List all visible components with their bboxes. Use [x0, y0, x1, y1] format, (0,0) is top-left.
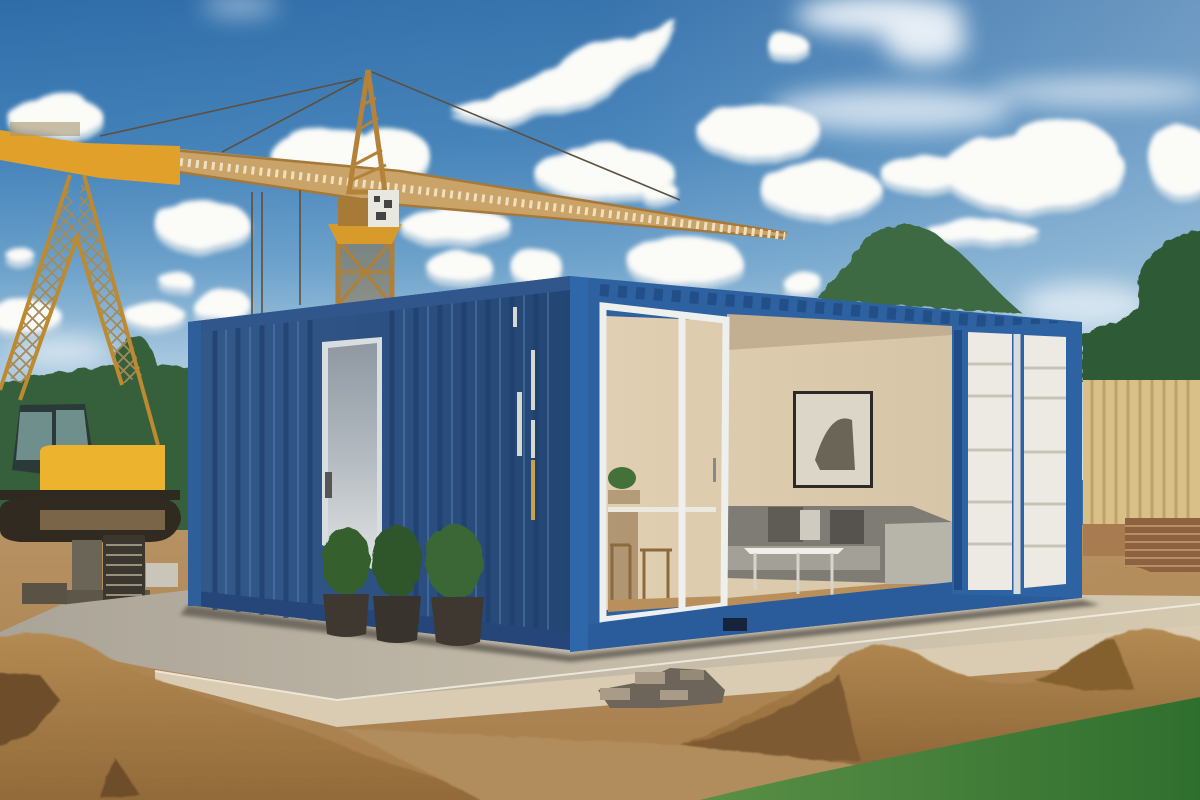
excavator: [0, 404, 181, 542]
concrete slab: [0, 590, 1200, 727]
container shadow: [180, 600, 1100, 662]
right pile: [680, 628, 1200, 765]
grass: [700, 697, 1200, 800]
bottom rail: [588, 582, 1080, 650]
gantry boom: [0, 130, 180, 185]
trees: left hedge: [0, 336, 192, 545]
plant 2: [372, 525, 422, 643]
coffee table: [744, 548, 844, 596]
open container doors: [952, 322, 1082, 598]
planters: [322, 524, 484, 646]
excavator tracks: [0, 498, 181, 542]
plant 1: [322, 527, 370, 637]
building materials left: [22, 535, 178, 630]
plant 3: [425, 524, 484, 646]
gantry legs: [0, 175, 158, 445]
crane mast: [338, 70, 392, 305]
side door: [322, 337, 382, 574]
crane cab: [328, 190, 402, 244]
lumber stack: [1082, 518, 1200, 596]
tower crane: [100, 70, 788, 315]
interior room: [606, 314, 952, 612]
container front frame: [570, 276, 1082, 652]
container side face: [188, 276, 570, 650]
sand foreground: [340, 728, 860, 800]
dirt piles: [0, 628, 1200, 800]
trees: right background: [820, 224, 1200, 382]
wall art: [793, 391, 873, 488]
container markings: [513, 307, 535, 520]
left gantry crane: [0, 122, 180, 445]
crane cables: [100, 72, 680, 315]
fence: corrugated beige wall: [1083, 380, 1200, 525]
sky: [0, 0, 1200, 480]
rubble: brick pile: [598, 668, 725, 708]
dining area: [608, 467, 726, 612]
top rail corrugation: [600, 290, 1070, 328]
sofa: [727, 506, 952, 584]
excavator body: [40, 445, 165, 490]
crane jib: [170, 148, 788, 238]
ground: sand: [0, 525, 1200, 800]
clouds: [0, 0, 1200, 364]
sliding glass door frame: [603, 306, 726, 620]
shipping container: [180, 276, 1100, 662]
excavator cab: [12, 404, 92, 480]
corner post: [570, 276, 588, 652]
large left pile: [0, 633, 520, 800]
